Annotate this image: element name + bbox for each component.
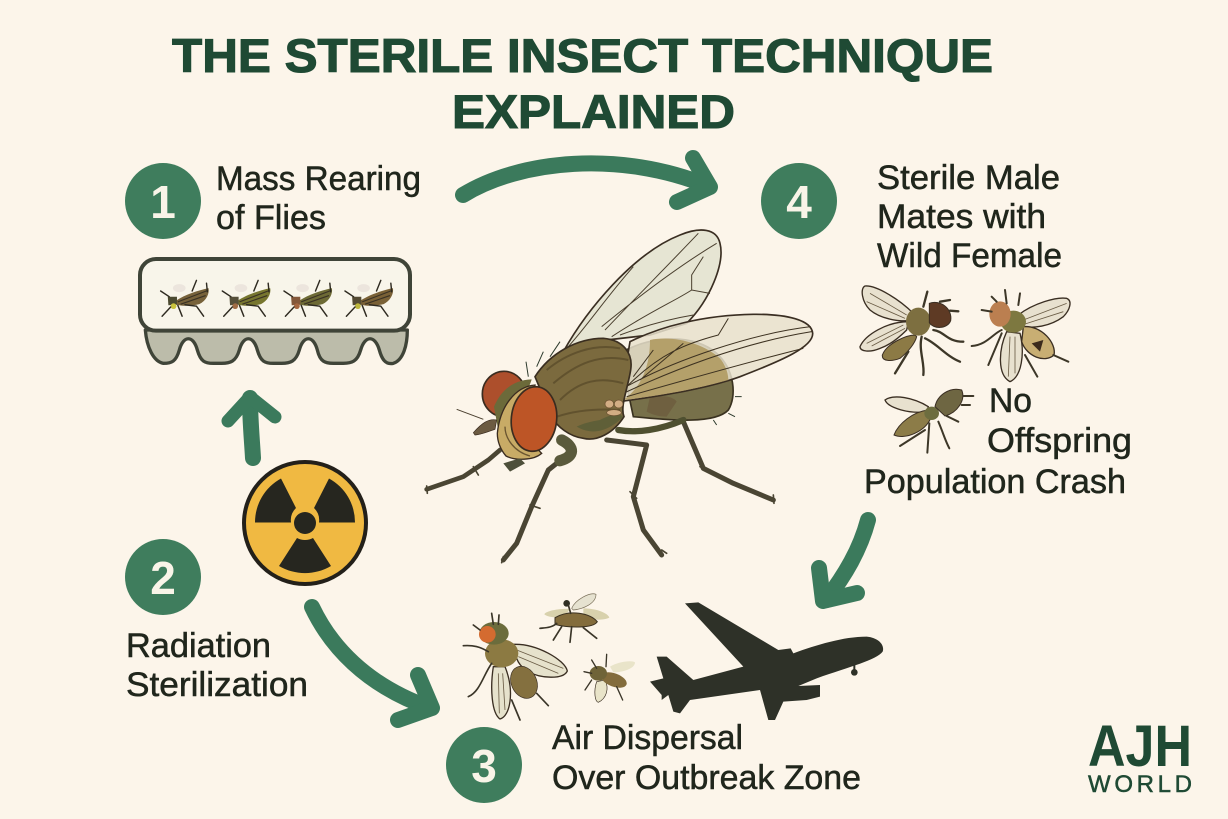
illustration: wild female fly	[972, 290, 1070, 382]
small fly	[584, 654, 635, 702]
upper wing	[563, 230, 721, 352]
step 3 label: Air Dispersal	[552, 719, 743, 757]
step 2 label	[126, 627, 308, 704]
step 3 number badge	[446, 727, 522, 803]
lower wing	[620, 314, 813, 402]
step 1 label: of Flies	[216, 199, 326, 237]
step 4 label: Mates with	[877, 198, 1046, 236]
arrow: step 2 to step 3	[312, 607, 432, 720]
step 2 number badge	[125, 539, 201, 615]
step 1 number badge: 1	[150, 176, 176, 228]
arrow: step 4 to step 3	[819, 520, 868, 601]
arrow: step 1 to step 4	[463, 158, 710, 202]
outcome label	[864, 382, 1132, 501]
step 1 label	[216, 160, 421, 237]
step 3 label: Over Outbreak Zone	[552, 759, 861, 797]
arrow: step 2 up to step 1	[228, 397, 275, 458]
large fly	[463, 613, 567, 720]
step 1 number badge	[125, 163, 201, 239]
wing base	[605, 400, 623, 416]
legs	[427, 420, 774, 563]
step 4 label: Wild Female	[877, 237, 1062, 275]
thorax	[535, 338, 631, 439]
step 3 number badge: 3	[471, 740, 497, 792]
logo: AJH World: WORLD	[1088, 771, 1192, 798]
outcome label: Population Crash	[864, 463, 1126, 501]
icon: airplane silhouette	[650, 602, 883, 720]
illustration: large central fly	[427, 230, 813, 563]
outcome label: No	[989, 382, 1032, 420]
icon: rearing tray with flies	[140, 259, 410, 364]
fly head	[457, 371, 560, 472]
title: THE STERILE INSECT TECHNIQUE	[172, 29, 993, 82]
step 2 number badge: 2	[150, 552, 176, 604]
icon: radiation symbol	[244, 462, 366, 584]
abdomen stripes	[647, 396, 677, 417]
title: EXPLAINED	[452, 85, 735, 138]
bristles	[526, 342, 742, 425]
top fly	[540, 594, 609, 642]
step 4 label: Sterile Male	[877, 159, 1060, 197]
illustration: sterile male fly	[860, 286, 963, 375]
illustration: third fly in step 4	[885, 389, 973, 453]
step 1 label: Mass Rearing	[216, 160, 421, 198]
title	[172, 29, 993, 138]
step 4 number badge: 4	[786, 176, 812, 228]
step 2 label: Radiation	[126, 627, 271, 665]
step 4 label	[877, 159, 1062, 275]
abdomen	[620, 339, 733, 420]
step 3 label	[552, 719, 861, 797]
illustration: dispersed flies	[463, 594, 635, 720]
logo: AJH World: AJH	[1088, 714, 1192, 779]
step 4 number badge	[761, 163, 837, 239]
outcome label: Offspring	[987, 422, 1132, 460]
step 2 label: Sterilization	[126, 666, 308, 704]
